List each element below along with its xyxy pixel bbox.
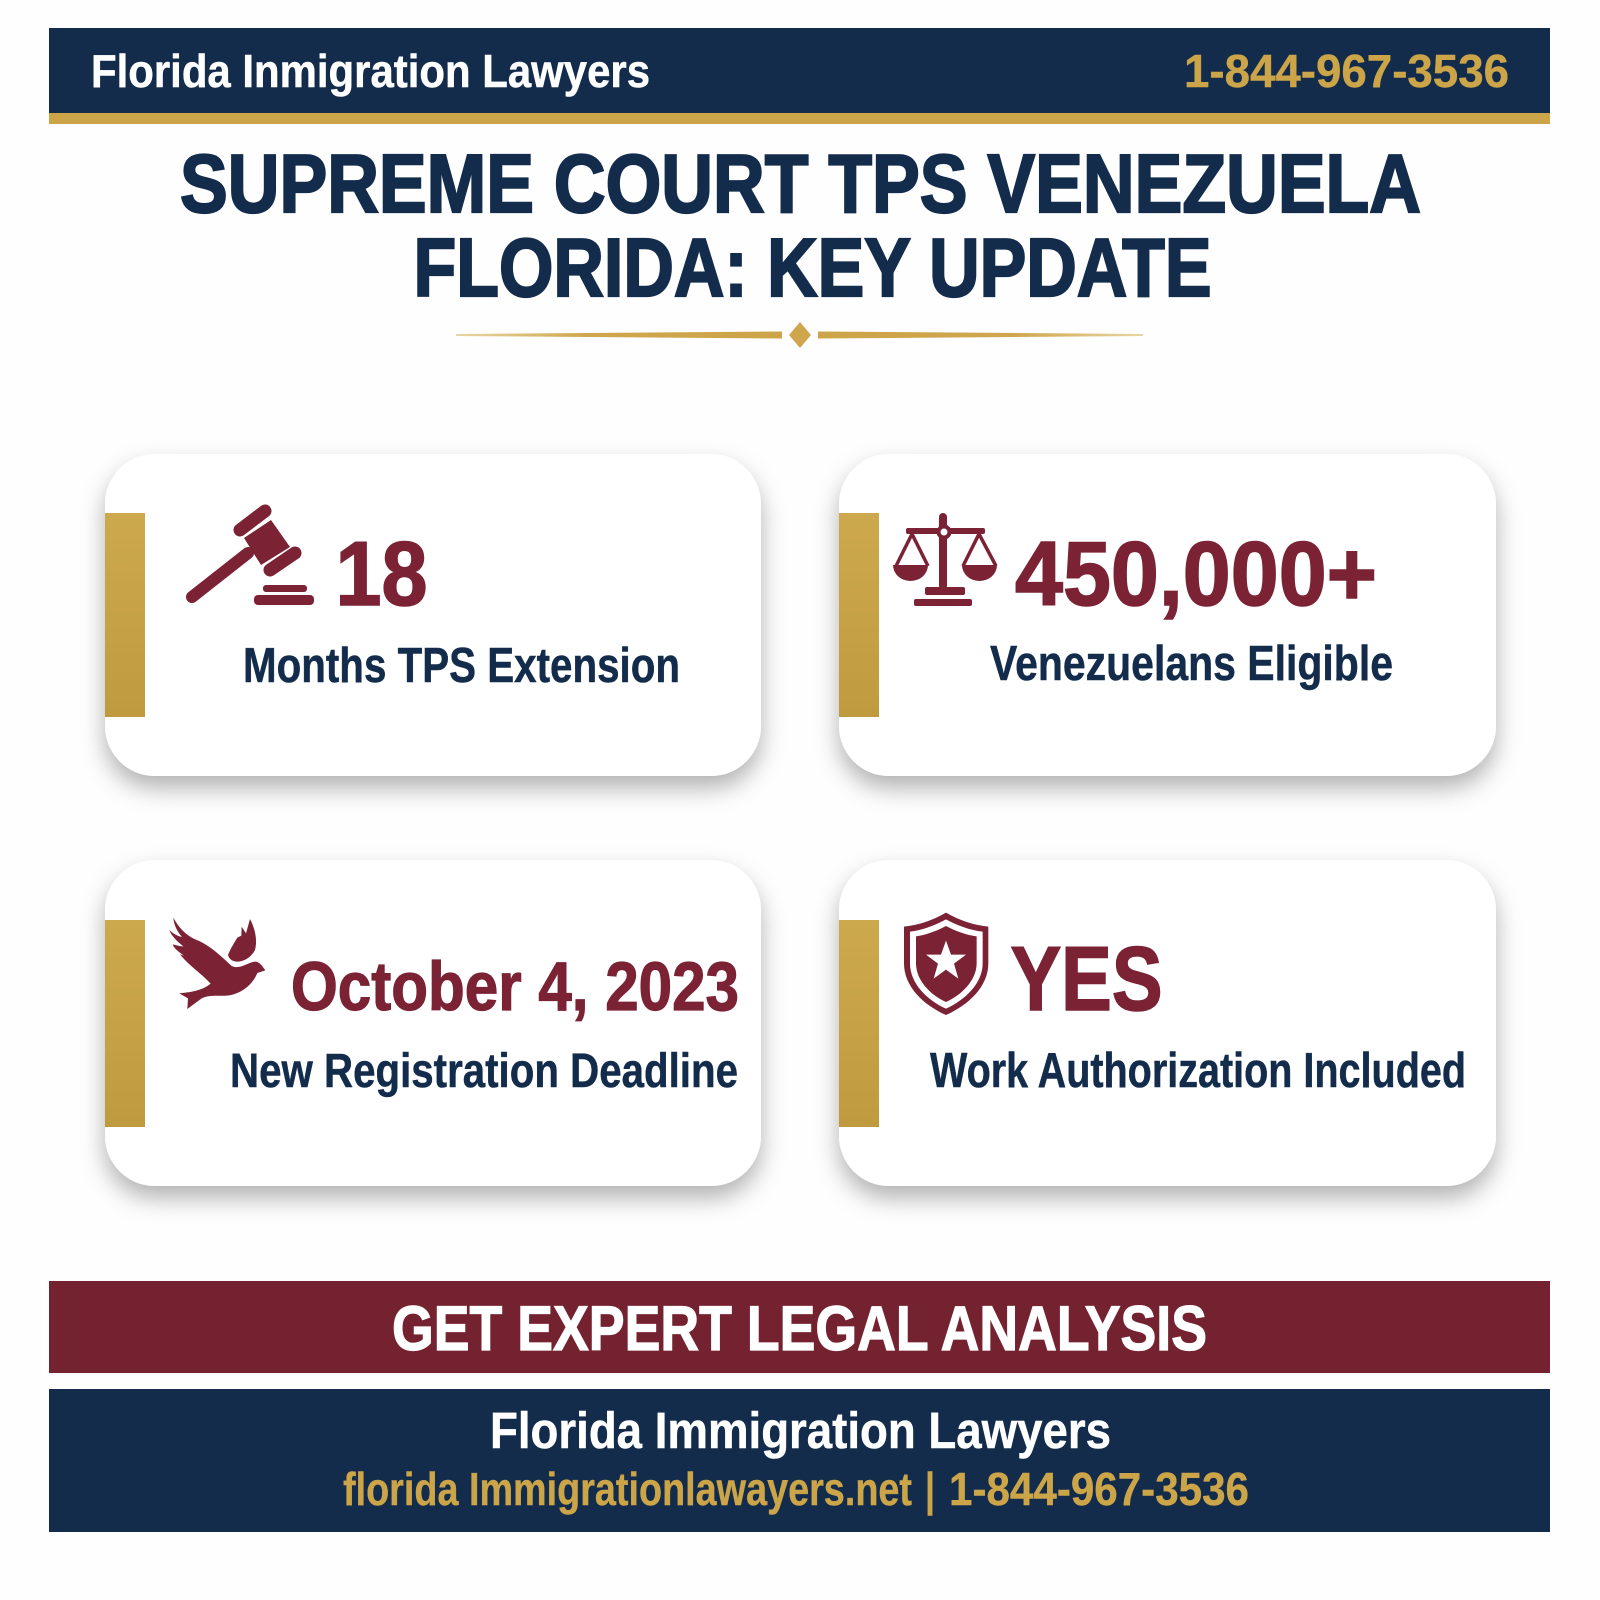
- header firm name: Florida Inmigration Lawyers: [91, 45, 650, 97]
- footer website and phone: |: [925, 1463, 935, 1515]
- call to action banner: GET EXPERT LEGAL ANALYSIS: [392, 1294, 1207, 1364]
- stat: 450,000+: 450,000+: [1015, 524, 1377, 625]
- footer firm name: Florida Immigration Lawyers: [490, 1402, 1111, 1459]
- label: months TPS extension: Months TPS Extension: [243, 639, 680, 693]
- label: work authorization included: Work Authorization Included: [930, 1044, 1466, 1098]
- call to action banner: [49, 1281, 1550, 1373]
- title: FLORIDA: KEY UPDATE: [414, 221, 1212, 314]
- stat: YES: YES: [1010, 929, 1162, 1030]
- panel: work authorization: [839, 860, 1496, 1186]
- footer website and phone: florida Immigrationlawayers.net: [343, 1463, 912, 1515]
- title divider: [456, 322, 1143, 348]
- icon: shield with star: [904, 913, 988, 1015]
- stat: 18: 18: [336, 524, 428, 625]
- stat: October 4, 2023: October 4, 2023: [291, 948, 739, 1025]
- label: Venezuelans eligible: Venezuelans Eligible: [990, 637, 1393, 691]
- panel: registration deadline: [105, 860, 761, 1186]
- title: SUPREME COURT TPS VENEZUELA: [180, 137, 1421, 230]
- title: [180, 137, 1421, 314]
- icon: scales of justice: [893, 513, 997, 606]
- footer contact band: [49, 1389, 1550, 1532]
- panel: 18 months: [105, 454, 761, 776]
- panel: 450,000+ eligible: [839, 454, 1496, 776]
- icon: gavel: [192, 511, 314, 605]
- label: new registration deadline: New Registration Deadline: [230, 1045, 738, 1098]
- footer website and phone: 1-844-967-3536: [949, 1463, 1249, 1515]
- header phone number: 1-844-967-3536: [1184, 45, 1509, 97]
- header bar: [49, 28, 1550, 124]
- icon: dove: [169, 918, 265, 1009]
